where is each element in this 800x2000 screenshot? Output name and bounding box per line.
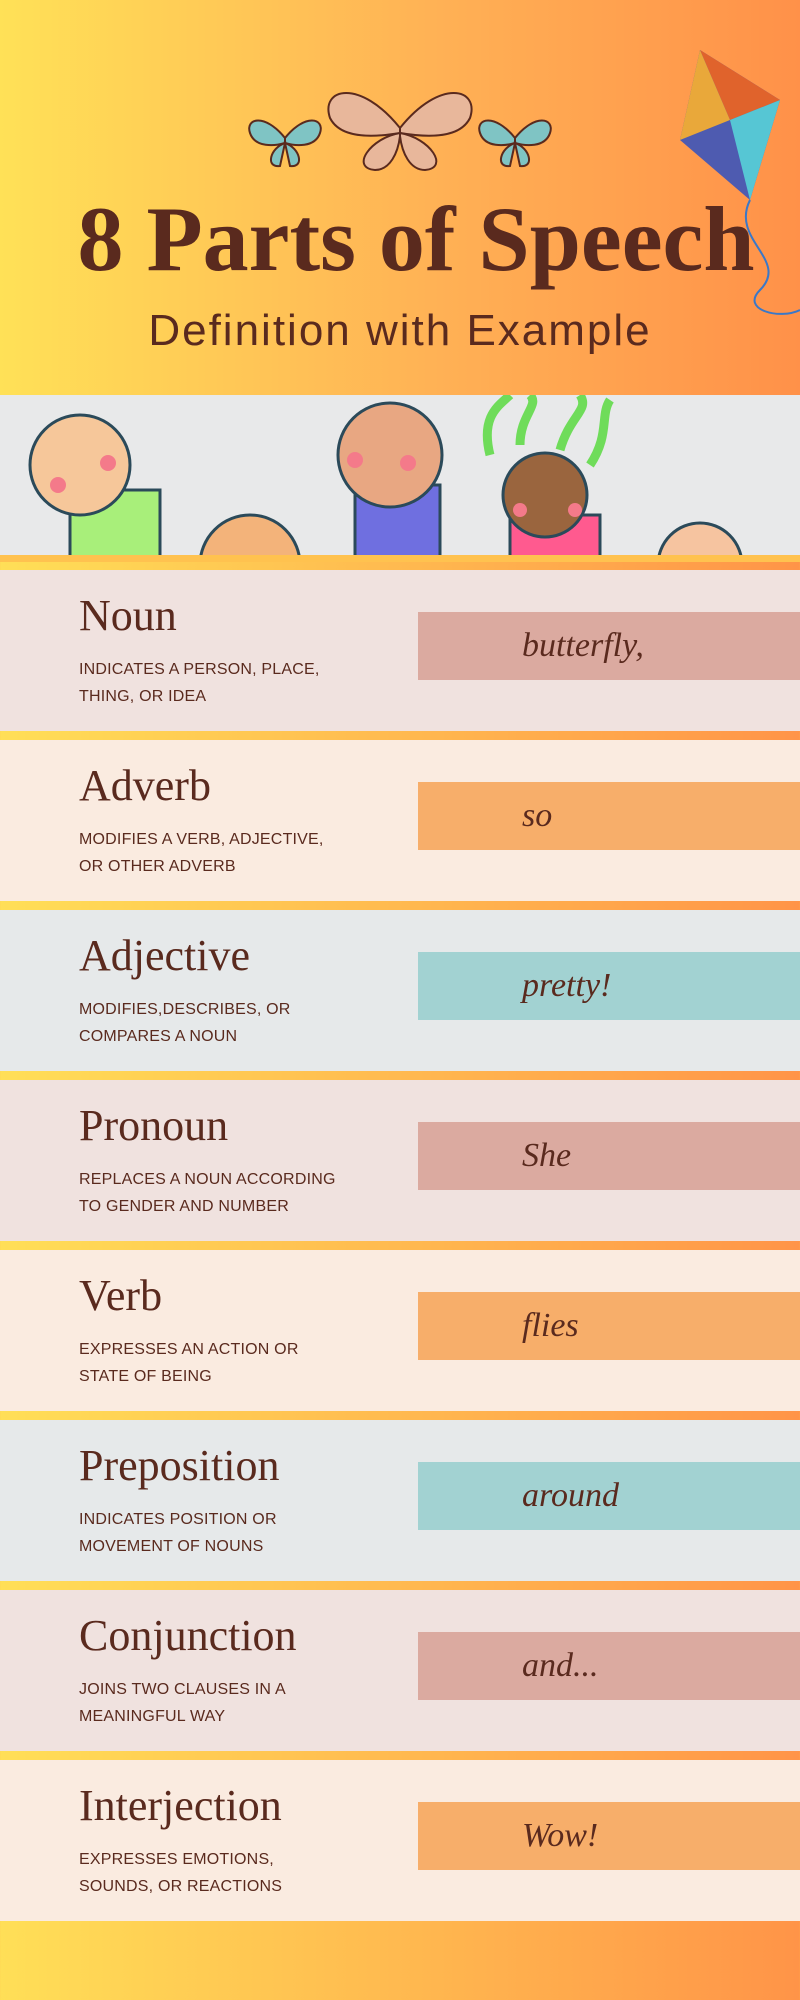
- icon: butterflies: [248, 92, 552, 171]
- example: around: [418, 1462, 800, 1530]
- panel: adjective: COMPARES A NOUN: [79, 1028, 237, 1045]
- panel: verb: [0, 1250, 800, 1411]
- example: flies: flies: [522, 1307, 579, 1344]
- panel: adjective: MODIFIES,DESCRIBES, OR: [79, 1001, 291, 1018]
- panel: adverb: MODIFIES A VERB, ADJECTIVE,: [79, 831, 324, 848]
- panel: conjunction: [0, 1590, 800, 1751]
- panel: pronoun: Pronoun: [79, 1101, 228, 1150]
- panel: interjection: EXPRESSES EMOTIONS,: [79, 1851, 274, 1868]
- example: pretty: [418, 952, 800, 1020]
- panel: pronoun: [0, 1080, 800, 1241]
- example: wow: [418, 1802, 800, 1870]
- panel: interjection: [0, 1760, 800, 1921]
- panel: preposition: INDICATES POSITION OR: [79, 1511, 277, 1528]
- example: around: around: [522, 1477, 619, 1514]
- panel: verb: STATE OF BEING: [79, 1368, 212, 1385]
- example: so: so: [522, 797, 552, 834]
- example: wow: Wow!: [522, 1817, 598, 1854]
- panel: adjective: [0, 910, 800, 1071]
- panel: noun: Noun: [79, 591, 177, 640]
- panel: conjunction: JOINS TWO CLAUSES IN A: [79, 1681, 286, 1698]
- example: and: [418, 1632, 800, 1700]
- panel: adverb: [0, 740, 800, 901]
- example: butterfly: butterfly,: [522, 627, 644, 664]
- example: she: She: [522, 1137, 571, 1174]
- icon: kite: [680, 50, 800, 315]
- panel: pronoun: TO GENDER AND NUMBER: [79, 1198, 289, 1215]
- example: she: [418, 1122, 800, 1190]
- panel: conjunction: Conjunction: [79, 1611, 297, 1660]
- title: 8 Parts of Speech: [77, 188, 755, 290]
- panel: adverb: OR OTHER ADVERB: [79, 858, 236, 875]
- panel: interjection: SOUNDS, OR REACTIONS: [79, 1878, 282, 1895]
- panel: verb: EXPRESSES AN ACTION OR: [79, 1341, 299, 1358]
- example: pretty: pretty!: [522, 967, 611, 1004]
- example: flies: [418, 1292, 800, 1360]
- example: and: and...: [522, 1647, 598, 1684]
- panel: interjection: Interjection: [79, 1781, 282, 1830]
- panel: verb: Verb: [79, 1271, 162, 1320]
- panel: preposition: [0, 1420, 800, 1581]
- panel: noun: [0, 570, 800, 731]
- subtitle: Definition with Example: [148, 306, 652, 355]
- panel: preposition: Preposition: [79, 1441, 279, 1490]
- panel: pronoun: REPLACES A NOUN ACCORDING: [79, 1171, 336, 1188]
- example: so: [418, 782, 800, 850]
- panel: noun: INDICATES A PERSON, PLACE,: [79, 661, 320, 678]
- header: [0, 0, 800, 395]
- panel: adverb: Adverb: [79, 761, 211, 810]
- example: butterfly: [418, 612, 800, 680]
- illustration: kids band: [0, 395, 800, 562]
- panel: conjunction: MEANINGFUL WAY: [79, 1708, 225, 1725]
- panel: preposition: MOVEMENT OF NOUNS: [79, 1538, 263, 1555]
- panel: adjective: Adjective: [79, 931, 250, 980]
- panel: noun: THING, OR IDEA: [79, 688, 206, 705]
